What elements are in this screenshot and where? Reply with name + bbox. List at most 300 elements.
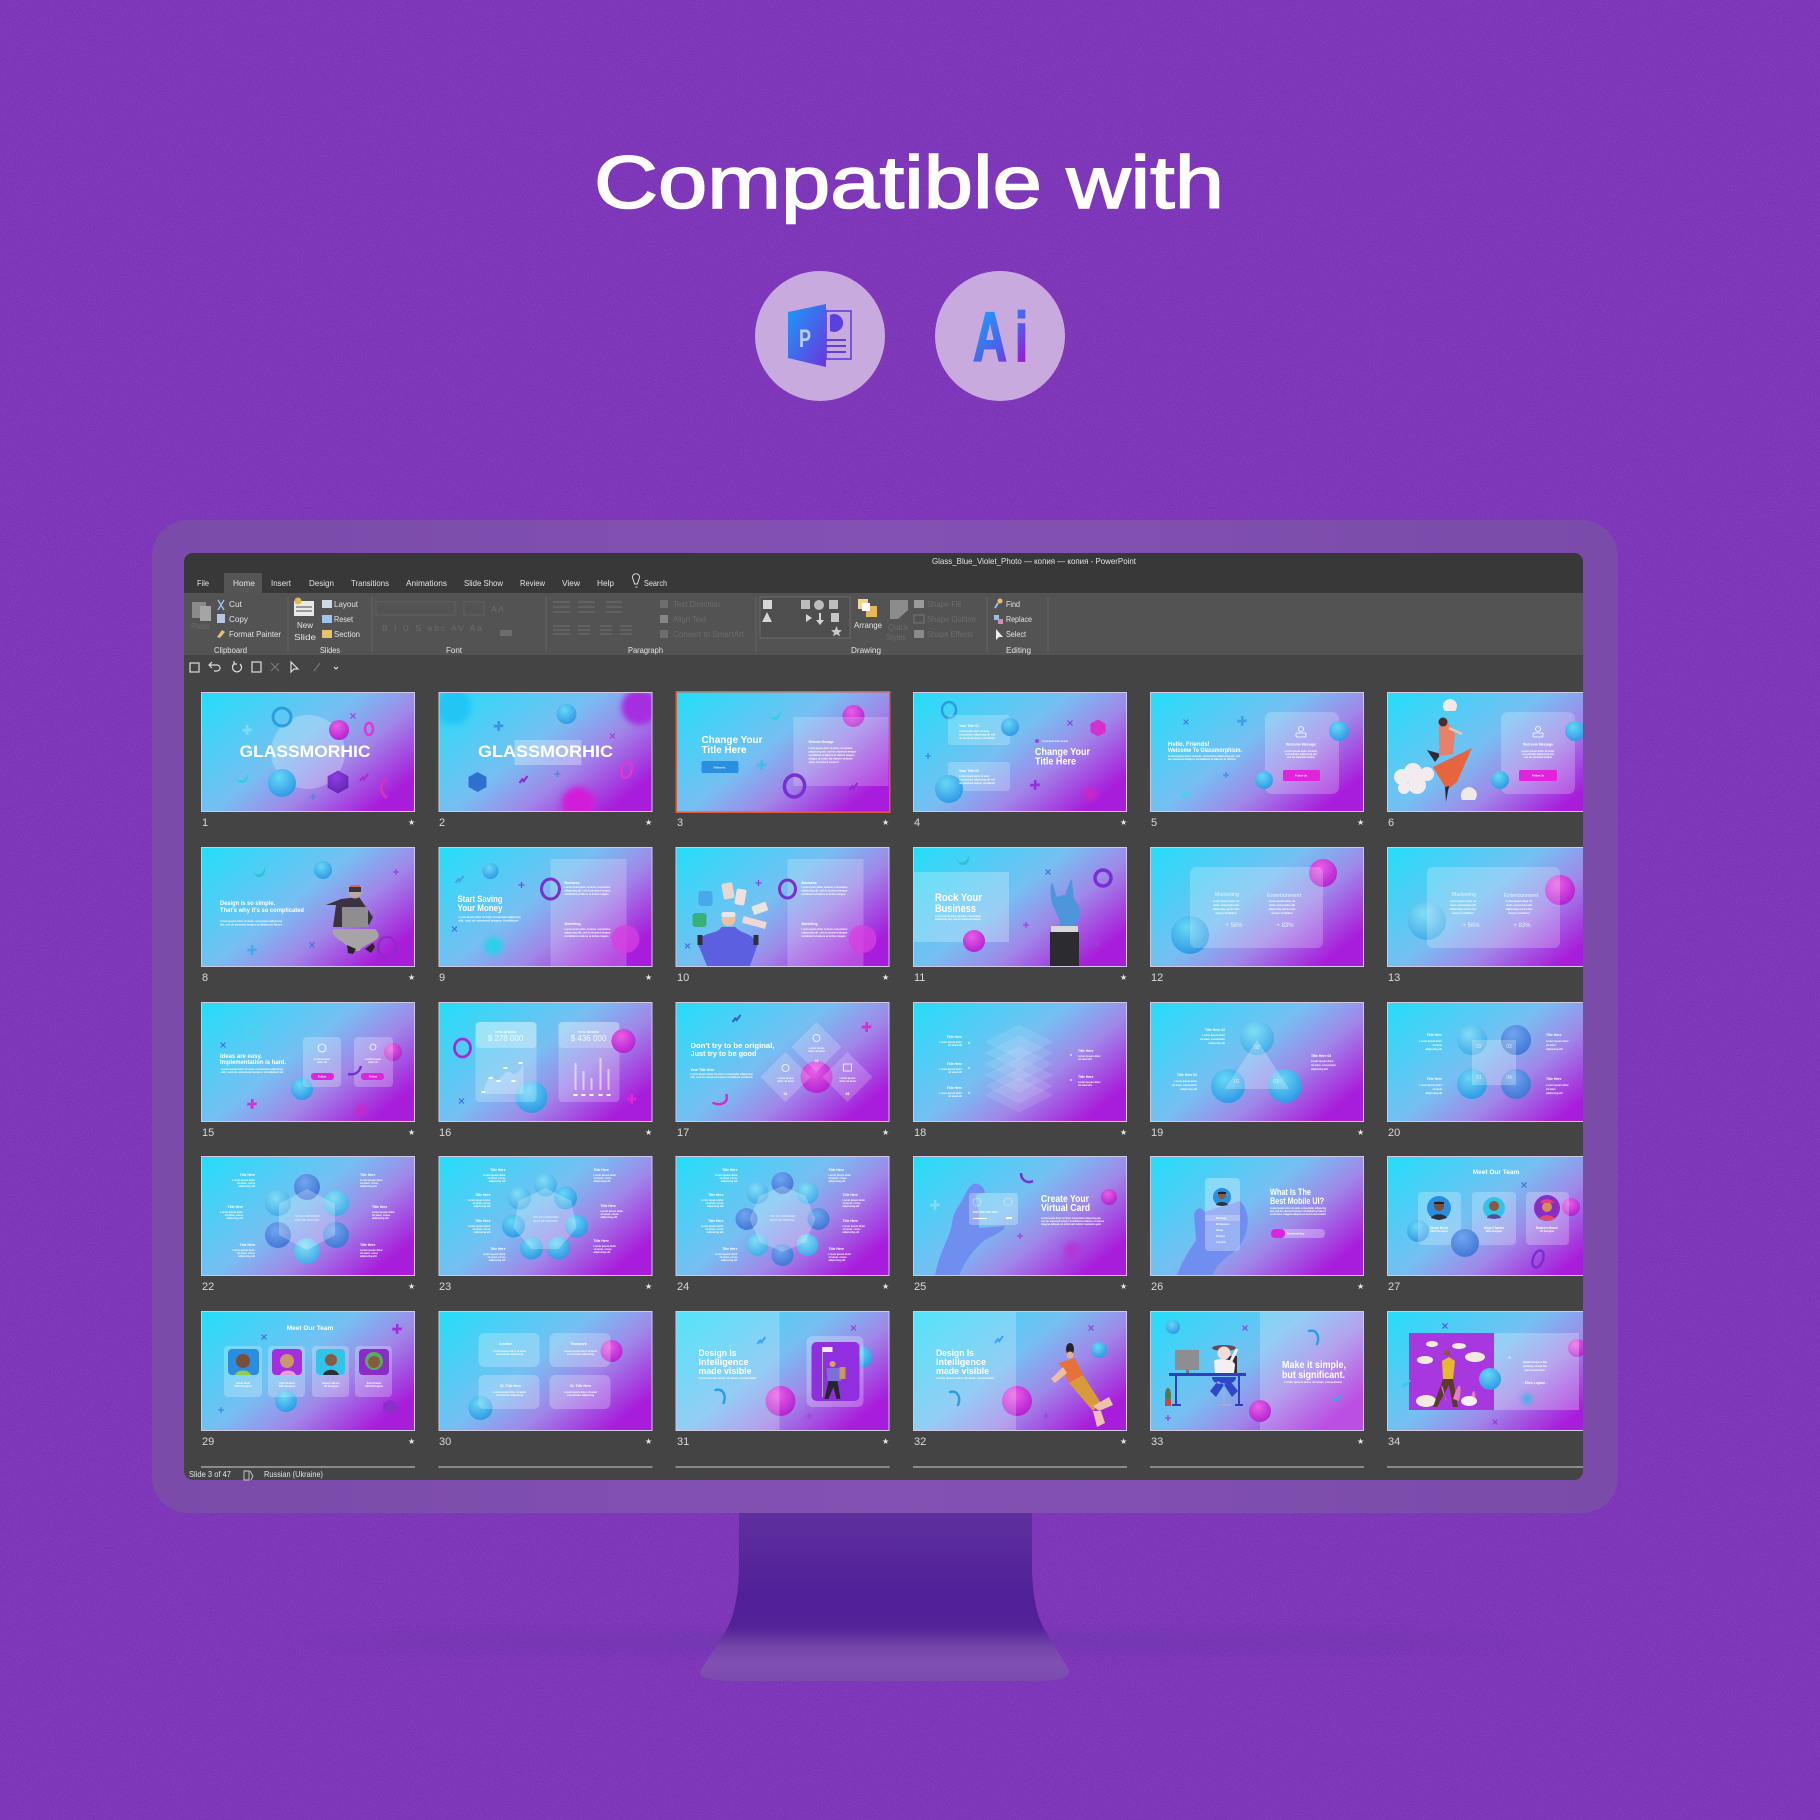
slide 19: 01 — [1234, 1079, 1240, 1085]
slide 18: sit amet elit — [948, 1044, 962, 1047]
slide 22: adipiscing elit — [238, 1185, 255, 1188]
slide 12: + 56% — [1225, 923, 1243, 929]
slide 34: - Ellen Lupton - — [1523, 1381, 1547, 1385]
slide 19: Title Here 03 — [1311, 1054, 1331, 1058]
monitor stand — [700, 1512, 1069, 1681]
slide 5: Follow Us — [1295, 774, 1308, 778]
slide 23: Title Here — [475, 1219, 491, 1223]
slide 6: Welcome Message — [1523, 742, 1553, 746]
slide 5: 5 — [1151, 817, 1157, 829]
slide 3 (selected): ★ — [882, 818, 889, 827]
slide 24: adipiscing elit — [842, 1231, 859, 1234]
quick access toolbar — [190, 661, 338, 672]
slide 5: consectetur adipiscing elit, — [1285, 753, 1317, 756]
slide 30: 01. Title Here — [500, 1384, 521, 1388]
slide 27: Deacon Moore — [1536, 1226, 1558, 1230]
slide 4: Lorem ipsum dolor sit amet — [959, 775, 989, 778]
monitor stand shadow — [290, 1633, 1530, 1651]
slide 24: sit amet, conse — [842, 1228, 861, 1231]
slide 29: Deacon Moore — [322, 1382, 340, 1385]
slide 25: sed do eiusmod tempor incididunt ut labore et dolore — [1041, 1220, 1105, 1223]
slide 10: Lorem ipsum dolor sit amet, consectetur — [802, 886, 848, 889]
slide 15: elit, sed do eiusmod tempor incididunt ut — [221, 1071, 283, 1074]
slide 22: Lorem ipsum dolor — [372, 1211, 395, 1214]
slide 10 — [676, 847, 890, 984]
slide 3 (selected): quis nostrud exerci — [808, 761, 839, 764]
slide 10: incididunt ut labore et dolore magna — [802, 935, 846, 938]
slide 23: Title Here — [490, 1168, 506, 1172]
slide 31: Design Is — [698, 1348, 736, 1358]
slide 12: 12 — [1151, 972, 1163, 984]
slide 19: Title Here 02 — [1205, 1028, 1225, 1032]
slide 12 — [1150, 847, 1364, 984]
slide 24: adipiscing elit — [707, 1205, 724, 1208]
screen: PowerPoint window — [184, 553, 1601, 1480]
slide 5: Lorem ipsum dolor sit amet, — [1284, 750, 1318, 753]
slide 23: Lorem ipsum dolor — [600, 1210, 623, 1213]
slide 4: Your Title 02 — [959, 769, 979, 773]
icon: Illustrator: A — [973, 298, 1007, 376]
slide 30: Lorem ipsum dolor sit amet — [493, 1350, 526, 1353]
slide 24: Lorem ipsum dolor — [701, 1199, 724, 1202]
slide 15: Follow — [369, 1076, 377, 1078]
slide 6 — [1387, 692, 1583, 826]
slides group: Reset — [334, 614, 354, 624]
slide 9: Lorem ipsum dolor sit amet, consectetur — [564, 886, 611, 889]
slide 19: 03 — [1273, 1079, 1279, 1085]
slide 19: sit amet, consectetur — [1200, 1038, 1225, 1041]
slide 24: adipiscing elit — [707, 1231, 724, 1234]
ribbon — [184, 593, 1583, 655]
slide 31: ★ — [882, 1437, 889, 1446]
slide 20: 03 — [1506, 1044, 1512, 1050]
slide 8: ★ — [408, 973, 415, 982]
slide 9: ★ — [645, 973, 652, 982]
clipboard group: Format Painter — [229, 629, 281, 639]
slide 17: dolor sit amet — [777, 1080, 794, 1083]
slide 18: 18 — [914, 1127, 926, 1139]
slide 5: Welcome Message — [1286, 742, 1316, 746]
slide 23: 23 — [439, 1281, 451, 1293]
slide 19: sit amet, consectetur — [1172, 1084, 1197, 1087]
slide 32 — [913, 1311, 1127, 1448]
slide 34 — [1387, 1311, 1601, 1448]
title bar and tabs: Search — [644, 578, 667, 588]
slide 31: 31 — [677, 1436, 689, 1448]
slide 15: Implementation is hard. — [220, 1059, 286, 1066]
clipboard group: Clipboard — [214, 645, 247, 655]
slide 30: consectetur adipiscing — [567, 1353, 595, 1356]
slide 33: ★ — [1357, 1437, 1364, 1446]
slide 16: $ 436 000 — [571, 1034, 607, 1043]
drawing group: Styles — [886, 632, 906, 642]
slide 20: Lorem ipsum dolor — [1546, 1040, 1569, 1043]
slide 33: but significant. — [1282, 1370, 1345, 1381]
slide 13: Marketing — [1452, 892, 1476, 898]
slide 6: 6 — [1388, 817, 1394, 829]
slide 20: adipiscing elit — [1425, 1092, 1442, 1095]
editing group: Select — [1006, 629, 1027, 639]
clipboard group: Paste — [191, 621, 210, 631]
slide 12: Lorem ipsum dolor sit — [1269, 900, 1295, 903]
slide 11: Business — [935, 903, 976, 915]
slide 29: ★ — [408, 1437, 415, 1446]
slide 20: Lorem ipsum dolor — [1419, 1040, 1442, 1043]
title: GLASSMORHIC — [478, 742, 613, 761]
slide 24: sit amet, conse — [719, 1256, 738, 1259]
slide 20: Lorem ipsum dolor — [1419, 1084, 1442, 1087]
slide 24: Title Here — [708, 1193, 724, 1197]
slide 3 (selected): Lorem ipsum dolor sit amet, consectetur — [808, 747, 853, 750]
slide 23: Lorem ipsum dolor — [594, 1245, 616, 1248]
slide 23: Title Here — [594, 1239, 609, 1243]
slide 23: sit amet, conse — [594, 1177, 612, 1180]
slide 24: sit amet, conse — [828, 1256, 847, 1259]
slide 8: elit, sed do eiusmod tempor incididunt ut labore — [220, 924, 283, 926]
slide 23: sit amet, conse — [487, 1177, 506, 1180]
slide 22: adipiscing elit — [360, 1185, 377, 1188]
slide 15: ★ — [408, 1128, 415, 1137]
slide 13: adipiscing sed do eius — [1450, 908, 1477, 911]
slide 23: Lorem ipsum dolor — [483, 1253, 506, 1256]
clipboard group — [191, 599, 281, 655]
slide 10: Marketing — [802, 922, 818, 926]
slide 5: Welcome To Glassmorphism. — [1168, 748, 1242, 754]
slide 24: Title Here — [708, 1219, 724, 1223]
slide 29: Evie Chavez — [367, 1382, 382, 1385]
slide 17: Lorem ipsum — [809, 1047, 825, 1050]
slide 8: Design is so simple. — [220, 900, 275, 907]
slide 12: tempor incididunt — [1271, 912, 1293, 915]
slide 30: Creative — [499, 1342, 512, 1346]
slide 10: incididunt ut labore et dolore magna — [802, 893, 846, 896]
status bar: Russian (Ukraine) — [264, 1469, 323, 1479]
slides group: Layout — [334, 599, 359, 609]
slide 25: Virtual Card — [1041, 1203, 1090, 1214]
slide 9: Business — [564, 881, 580, 885]
slide 12: amet, consectetur elit — [1213, 904, 1239, 907]
slide 3 (selected): aliqua ut enim ad minim veniam — [808, 758, 853, 760]
slide 16: ★ — [645, 1128, 652, 1137]
slide 11: ★ — [1120, 973, 1127, 982]
slide 24: Lorem ipsum dolor — [842, 1225, 865, 1228]
slide 18: Lorem ipsum dolor — [939, 1041, 962, 1044]
slide 18: sit amet elit — [1078, 1058, 1092, 1061]
font group: A A — [491, 604, 504, 614]
slide 22: adipiscing elit — [226, 1217, 243, 1220]
slide 20: adipiscing elit — [1546, 1092, 1563, 1095]
slide 17: 01 — [784, 1092, 787, 1096]
paragraph group: Align Text — [673, 614, 707, 624]
slide 4: do eiusmod tempor incididunt — [959, 782, 995, 785]
slide 24: Title Here — [828, 1247, 844, 1251]
slide 4: Title Here — [1035, 756, 1076, 768]
slides group: Section — [334, 629, 360, 639]
slide 18: Lorem ipsum dolor — [1078, 1081, 1101, 1084]
slide 33 — [1150, 1311, 1364, 1448]
slide 17: Lorem ipsum — [840, 1077, 856, 1080]
slide 22: ★ — [408, 1282, 415, 1291]
slide 29: Web Designer — [279, 1385, 295, 1388]
icon: PowerPoint — [755, 271, 885, 401]
editing group: Find — [1006, 599, 1020, 609]
slide 34: painting, except the — [1523, 1365, 1547, 1368]
title bar and tabs: Home — [233, 578, 255, 588]
slide 22: Lorem ipsum dolor — [220, 1211, 243, 1214]
slide 24: Lorem ipsum dolor — [715, 1174, 738, 1177]
slide 9: Marketing — [564, 922, 581, 926]
icon: Illustrator: i — [1015, 298, 1028, 376]
slide 4: consectetur adipiscing elit sed — [959, 778, 995, 782]
slide 17: Lorem ipsum — [778, 1077, 794, 1080]
slide 17: ★ — [882, 1128, 889, 1137]
slide 20: sit amet — [1546, 1088, 1556, 1091]
slide 9: incididunt ut labore et dolore magna — [564, 935, 609, 938]
slide 27: UX/UI Designer — [1430, 1230, 1448, 1233]
slide 22 — [201, 1156, 415, 1293]
slide 24: Lorem ipsum dolor — [828, 1253, 851, 1256]
next row thumbnail edges — [201, 1466, 1601, 1468]
slide 19: adipiscing elit — [1180, 1088, 1197, 1091]
slide 25: Lorem ipsum dolor sit amet, consectetur adipiscing elit, — [1041, 1217, 1101, 1220]
slide 4: Change Your — [1035, 747, 1090, 758]
slide 22: Title Here — [240, 1173, 255, 1177]
slide 24: MUST BE CREATIVE — [770, 1219, 795, 1222]
slide 29: Aliya Charles — [279, 1382, 296, 1385]
slide 23: sit amet, conse — [472, 1228, 491, 1231]
title: Compatible with — [594, 141, 1224, 224]
slide 13: Entertainment — [1504, 893, 1539, 899]
slide 9: adipiscing elit, sed do eiusmod tempor — [564, 890, 611, 892]
slide 19: Lorem ipsum dolor — [1174, 1080, 1197, 1083]
slide 10: adipiscing elit, sed do eiusmod tempor — [802, 932, 848, 934]
slide 22: Lorem ipsum dolor — [232, 1249, 255, 1252]
slide 18: Lorem ipsum dolor — [939, 1092, 962, 1095]
slide 20: Lorem ipsum dolor — [1546, 1084, 1569, 1087]
slide 22: sit amet, conse — [237, 1182, 256, 1185]
slide 26: Log Out — [1216, 1241, 1226, 1244]
slide 18: sit amet elit — [1078, 1084, 1092, 1087]
slide 5: sed do eiusmod tempor — [1287, 756, 1315, 759]
slide 17: Lorem ipsum dolor sit amet, consectetur adipiscing — [690, 1073, 753, 1076]
slide 30: Lorem ipsum dolor sit amet — [564, 1391, 597, 1394]
clipboard group: Copy — [229, 614, 249, 624]
slide 30: Lorem ipsum dolor sit amet — [564, 1350, 597, 1353]
slide 4: consectetur adipiscing elit sed — [959, 734, 995, 736]
slide 32: ★ — [1120, 1437, 1127, 1446]
slide 26: ★ — [1357, 1282, 1364, 1291]
slide 32: Lorem ipsum dolor sit amet, consectetur — [936, 1377, 994, 1380]
slide 12: Lorem ipsum dolor sit — [1213, 900, 1239, 903]
slide 31: Lorem ipsum dolor sit amet, consectetur — [698, 1377, 757, 1380]
title bar and tabs: Design — [309, 578, 334, 588]
slide 20: 01 — [1476, 1075, 1482, 1081]
slide 22: Lorem ipsum dolor — [360, 1249, 383, 1252]
slides group: Slides — [320, 645, 340, 655]
slide 17: Just try to be good — [690, 1049, 757, 1058]
slide 18: Lorem ipsum dolor — [1078, 1055, 1101, 1058]
slides group: Slide — [294, 632, 316, 642]
slide 12: + 83% — [1276, 923, 1294, 929]
slide 17: elit, sed do eiusmod tempor incididunt ut labore — [690, 1076, 753, 1079]
slide 22: Title Here — [240, 1243, 255, 1247]
slide 12: adipiscing sed do eius — [1213, 908, 1240, 911]
slide 18: Title Here — [947, 1035, 962, 1039]
slide 24: Lorem ipsum dolor — [842, 1199, 865, 1202]
slide 23: Title Here — [475, 1193, 491, 1197]
slide 24: Lorem ipsum dolor — [828, 1174, 851, 1177]
slide 11 — [913, 847, 1127, 984]
slide 11: Rock Your — [935, 892, 983, 904]
font group — [376, 602, 512, 655]
slide 20: Title Here — [1427, 1077, 1442, 1081]
slide 12: amet, consectetur elit — [1269, 904, 1295, 907]
slide 18: Title Here — [1078, 1049, 1094, 1053]
slide 13: 13 — [1388, 972, 1400, 984]
slide 31: made visible — [698, 1366, 752, 1376]
slide 22: 22 — [202, 1281, 214, 1293]
title bar and tabs: Review — [520, 578, 546, 588]
slide 9: Start Saving — [458, 894, 502, 904]
slide 23: adipiscing elit — [489, 1180, 506, 1183]
editing group — [994, 598, 1032, 655]
title bar and tabs: Glass_Blue_Violet_Photo — копия — копия - PowerPoint — [932, 556, 1137, 566]
slide 4: Lorem ipsum dolor sit amet — [1042, 740, 1068, 743]
slide 29: UX/UI Designer — [365, 1385, 383, 1388]
slide 24: sit amet, conse — [719, 1177, 738, 1180]
slide 2: 2 — [439, 817, 445, 829]
slide 17: Don't try to be original, — [690, 1041, 775, 1050]
slide 10: Lorem ipsum dolor sit amet, consectetur — [802, 928, 848, 931]
slide 33: 33 — [1151, 1436, 1163, 1448]
slide 3 (selected): Change Your — [702, 735, 763, 746]
slide 23: Lorem ipsum dolor — [483, 1174, 506, 1177]
slide 18: Title Here — [947, 1062, 962, 1066]
title bar and tabs: View — [562, 578, 581, 588]
drawing group: Arrange — [854, 620, 882, 630]
paragraph group: Text Direction — [673, 599, 720, 609]
slide 20: 20 — [1388, 1127, 1400, 1139]
slide 17: 03 — [846, 1092, 849, 1096]
slide 23: Lorem ipsum dolor — [468, 1225, 491, 1228]
slide 19: 19 — [1151, 1127, 1163, 1139]
slide 5: ★ — [1357, 818, 1364, 827]
slide 24: Title Here — [828, 1168, 844, 1172]
slide 1: 1 — [202, 817, 208, 829]
slide 15: 15 — [202, 1127, 214, 1139]
slide 32: 32 — [914, 1436, 926, 1448]
slide 23: Lorem ipsum dolor — [468, 1199, 491, 1202]
slide 16 — [438, 1002, 652, 1139]
slide 23: YOU AS A DESIGNER — [533, 1216, 558, 1219]
slide 12: tempor incididunt — [1215, 912, 1237, 915]
slide 18: ★ — [1120, 1128, 1127, 1137]
slide 26: elit, sed do eiusmod tempor incididunt ut labore — [1270, 1210, 1327, 1213]
slide 19 — [1150, 1002, 1364, 1139]
slide 24: sit amet, conse — [828, 1177, 847, 1180]
slide 26: Privacy — [1216, 1235, 1226, 1238]
slide 19: sit amet, consectetur — [1311, 1064, 1336, 1067]
slide 15: Lorem ipsum — [365, 1058, 382, 1061]
slide 24: Lorem ipsum dolor — [715, 1253, 738, 1256]
slide 23: adipiscing elit — [594, 1251, 610, 1254]
slide 19: Title Here 01 — [1177, 1073, 1197, 1077]
slide 9: adipiscing elit, sed do eiusmod tempor — [564, 932, 611, 934]
slide 24: 24 — [677, 1281, 689, 1293]
slide 11: adipiscing elit, sed do eiusmod tempor — [935, 918, 981, 921]
slide 2: ★ — [645, 818, 652, 827]
slide 27: Aliya Charles — [1484, 1226, 1504, 1230]
slide 23: adipiscing elit — [489, 1259, 506, 1262]
slide 20: Title Here — [1546, 1077, 1562, 1081]
slide 4: ★ — [1120, 818, 1127, 827]
slide 9: Your Money — [458, 903, 502, 913]
slide 11: Lorem ipsum dolor sit amet, consectetur — [935, 915, 981, 918]
slide 31: Intelligence — [698, 1357, 748, 1367]
slide 13: Lorem ipsum dolor sit — [1506, 900, 1532, 903]
title bar and tabs: File — [197, 578, 209, 588]
slide 24: ★ — [882, 1282, 889, 1291]
slide 25 — [913, 1156, 1127, 1293]
editing group: Replace — [1006, 614, 1032, 624]
slide 27: Meet Our Team — [1473, 1169, 1519, 1176]
editing group: Editing — [1006, 645, 1031, 655]
slide 26: Download App — [1287, 1232, 1305, 1236]
slide 25: 25 — [914, 1281, 926, 1293]
slide 22: Lorem ipsum dolor — [360, 1179, 383, 1182]
slide 23: adipiscing elit — [600, 1216, 617, 1219]
slide 9: Lorem ipsum dolor sit amet, consectetur — [564, 928, 611, 931]
slide 9: elit, sed do eiusmod tempor incididunt — [458, 920, 519, 922]
slide 16: 16 — [439, 1127, 451, 1139]
slide 20: sit amet — [1433, 1088, 1442, 1091]
slide 3 (selected): incididunt ut labore et dolore magna — [808, 754, 855, 757]
slide 22: Lorem ipsum dolor — [232, 1179, 255, 1182]
slide 24: adipiscing elit — [828, 1259, 845, 1262]
window background — [184, 553, 1583, 1480]
slide 3 (selected): 3 — [677, 817, 683, 829]
slide 27: 27 — [1388, 1281, 1400, 1293]
slide 22: sit amet, conse — [225, 1214, 244, 1217]
slide 18: sit amet elit — [948, 1095, 962, 1098]
clipboard group: Cut — [229, 599, 243, 609]
slide 6: Follow Us — [1532, 774, 1545, 778]
slide 12: Marketing — [1215, 892, 1239, 898]
slide 22: sit amet, conse — [237, 1252, 256, 1255]
slide 22: MUST BE CREATIVE — [295, 1219, 320, 1222]
slides group — [294, 598, 360, 655]
slide 30: consectetur adipiscing — [496, 1394, 524, 1397]
slide 24: adipiscing elit — [842, 1205, 859, 1208]
slide 13: tempor incididunt — [1508, 912, 1530, 915]
slide 25: ★ — [1120, 1282, 1127, 1291]
slide 1: ★ — [408, 818, 415, 827]
title bar and tabs: Insert — [271, 578, 292, 588]
slide 22: Title Here — [360, 1243, 376, 1247]
slide 20: Title Here — [1427, 1033, 1442, 1037]
slide 3 (selected): Follow Us — [714, 766, 726, 770]
slide 19: Lorem ipsum dolor — [1311, 1060, 1334, 1063]
slide 18: sit amet elit — [948, 1071, 962, 1074]
slide 30: Teamwork — [570, 1342, 587, 1346]
slide 32: Intelligence — [936, 1357, 986, 1367]
slide 26: et dolore magna aliqua ut enim ad minim — [1270, 1213, 1327, 1216]
slide 15: Lorem ipsum — [314, 1058, 331, 1061]
slide 24: Title Here — [842, 1219, 858, 1223]
slide 30: ★ — [645, 1437, 652, 1446]
slide 23: adipiscing elit — [474, 1205, 491, 1208]
slide 17: dolor sit amet — [808, 1050, 825, 1053]
